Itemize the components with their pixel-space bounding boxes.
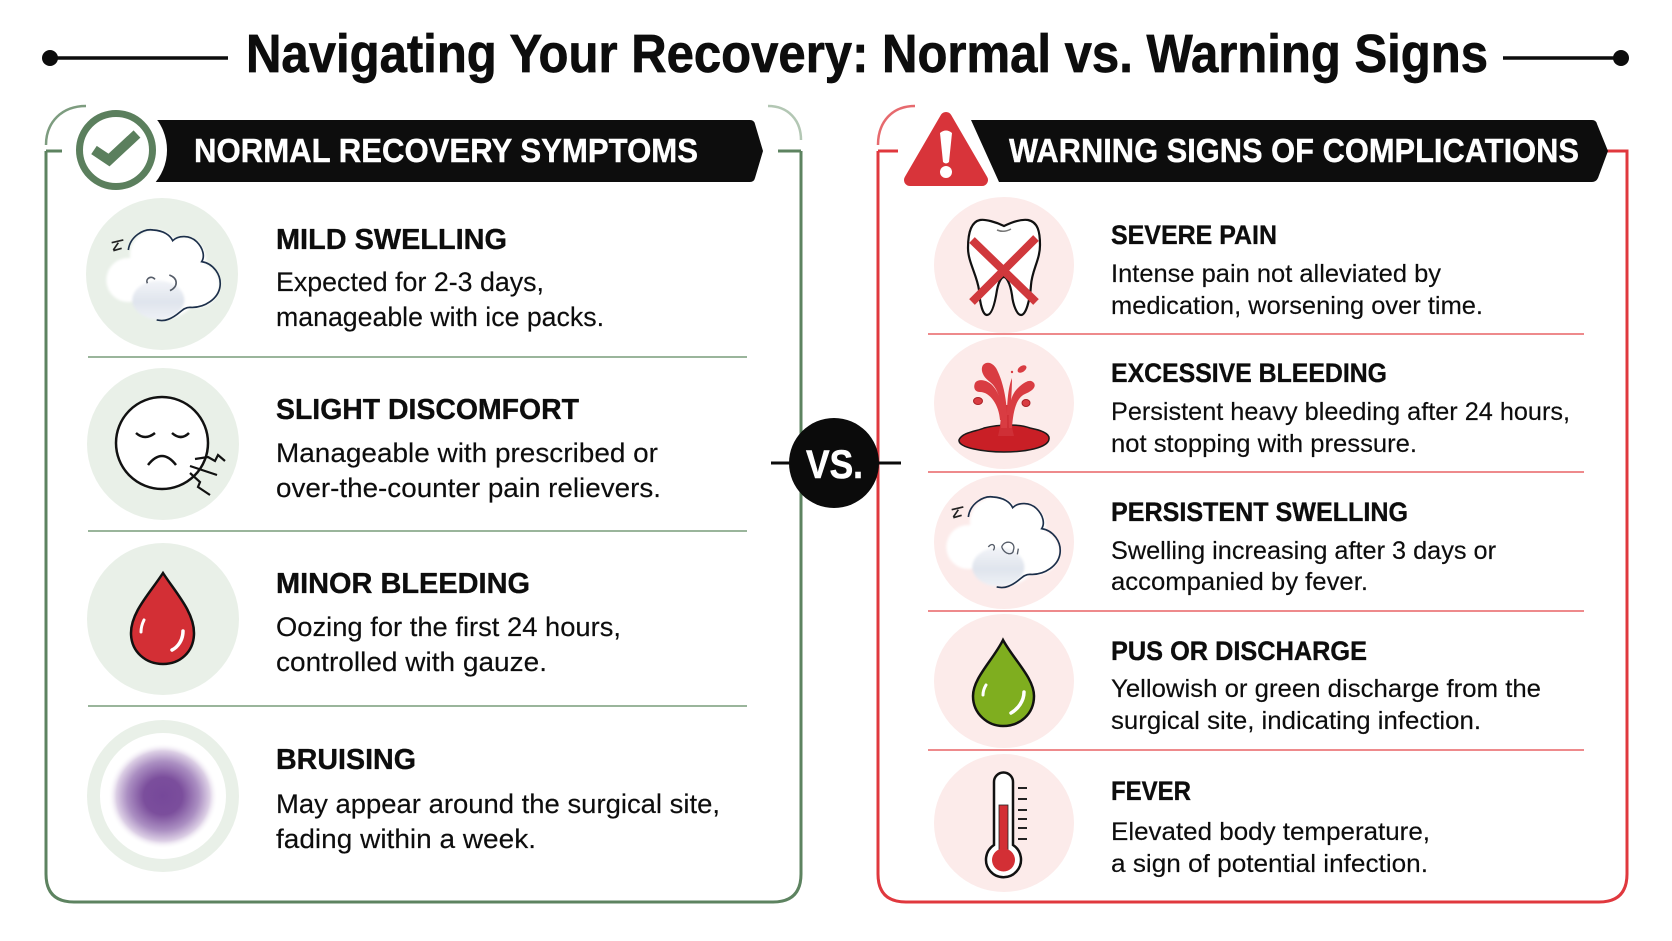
row: mild swelling: [86, 198, 604, 350]
description line 2: manageable with ice packs.: [276, 302, 604, 332]
description: Persistent heavy bleeding after 24 hours,: [1111, 398, 1570, 426]
row: persistent swelling: [934, 475, 1496, 609]
heading: SLIGHT DISCOMFORT: [276, 394, 579, 426]
row: fever: [934, 754, 1430, 892]
heading: FEVER: [1111, 776, 1191, 806]
row: slight discomfort: [87, 368, 661, 520]
description: Oozing for the first 24 hours,: [276, 612, 621, 642]
description: Elevated body temperature,: [1111, 818, 1430, 846]
header banner: normal: NORMAL RECOVERY SYMPTOMS: [194, 132, 698, 169]
row: pus or discharge: [934, 614, 1541, 748]
description line 2: surgical site, indicating infection.: [1111, 707, 1481, 735]
description line 2: controlled with gauze.: [276, 647, 547, 677]
description line 2: accompanied by fever.: [1111, 568, 1368, 596]
description: Yellowish or green discharge from the: [1111, 675, 1541, 703]
heading: EXCESSIVE BLEEDING: [1111, 358, 1387, 388]
title with end rules: Navigating Your Recovery: Normal vs. Warning Signs: [246, 24, 1488, 84]
icon: green drop: [934, 614, 1074, 748]
description: Swelling increasing after 3 days or: [1111, 537, 1496, 565]
description: Manageable with prescribed or: [276, 438, 658, 468]
icon: purple bruise: [87, 720, 239, 872]
description line 2: fading within a week.: [276, 824, 536, 854]
heading: MINOR BLEEDING: [276, 568, 530, 600]
description: Expected for 2-3 days,: [276, 267, 544, 297]
heading: MILD SWELLING: [276, 224, 507, 256]
row: minor bleeding: [87, 543, 621, 695]
panel: warning signs of complications: [878, 106, 1627, 902]
icon: tooth with red X: [934, 197, 1074, 333]
header banner: warning: WARNING SIGNS OF COMPLICATIONS: [1009, 132, 1579, 169]
row: severe pain: [934, 197, 1483, 333]
icon: thermometer: [934, 754, 1074, 892]
heading: SEVERE PAIN: [1111, 220, 1277, 250]
icon: swollen cloud, red: [934, 475, 1074, 609]
icon: warning triangle: [910, 118, 982, 180]
icon: sad face with pain sparks: [87, 368, 239, 520]
header banner: normal: [65, 99, 763, 201]
icon: gushing blood: [934, 337, 1074, 469]
description: Intense pain not alleviated by: [1111, 260, 1442, 288]
VS. badge: VS.: [806, 443, 863, 487]
description line 2: a sign of potential infection.: [1111, 850, 1428, 878]
row: bruising: [87, 720, 720, 872]
heading: PUS OR DISCHARGE: [1111, 636, 1367, 666]
description line 2: not stopping with pressure.: [1111, 430, 1417, 458]
VS. badge: [771, 418, 901, 508]
row: excessive bleeding: [934, 337, 1570, 469]
icon: swollen cloud: [86, 198, 238, 350]
panel: normal recovery symptoms: [46, 99, 801, 902]
heading: PERSISTENT SWELLING: [1111, 497, 1408, 527]
heading: BRUISING: [276, 744, 416, 776]
description line 2: over-the-counter pain relievers.: [276, 473, 661, 503]
description: May appear around the surgical site,: [276, 789, 720, 819]
description line 2: medication, worsening over time.: [1111, 292, 1483, 320]
icon: green check badge: [80, 114, 152, 186]
icon: red drop: [87, 543, 239, 695]
header banner: warning: [971, 120, 1608, 182]
